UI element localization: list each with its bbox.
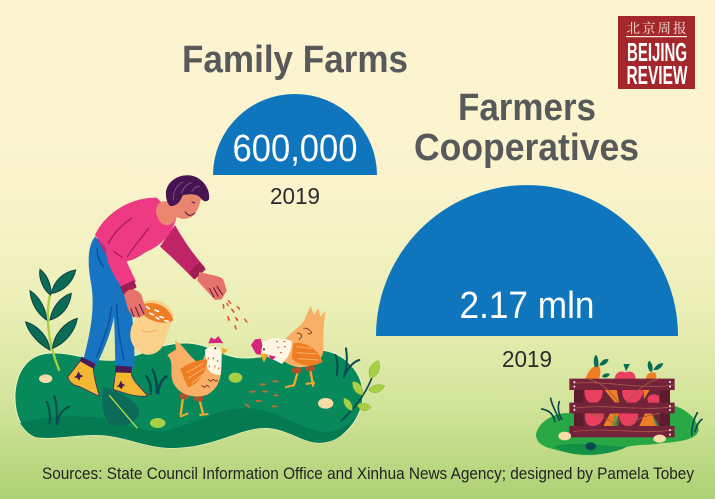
semicircle: family farms 600,000: 600,000: [232, 128, 358, 170]
falling seeds and ground grain: [223, 301, 278, 407]
title: Farmers Cooperatives: Cooperatives: [414, 127, 639, 169]
crate of carrots and apples on mound: [536, 355, 702, 455]
farmer trousers: [83, 237, 134, 369]
seed bag: [130, 300, 174, 355]
semicircle: farmers cooperatives 2.17 mln: [376, 185, 678, 336]
mound: [536, 405, 699, 455]
leaf near feet: [102, 387, 139, 426]
farmer far arm: [160, 225, 205, 279]
hen pecking: [251, 306, 326, 387]
farmer boots: [79, 357, 132, 373]
title: Farmers Cooperatives: [414, 87, 639, 169]
pebbles, grass and sprig on right of island: [146, 348, 385, 428]
title: Farmers Cooperatives: Farmers: [458, 87, 596, 129]
ground island with plant: [15, 269, 363, 448]
year label: family farms 2019: 2019: [270, 183, 320, 209]
carrots and apples: [585, 366, 657, 379]
title: Family Farms: Family Farms: [182, 39, 408, 81]
farmer figure: [68, 175, 240, 396]
farmer hands: [197, 272, 227, 300]
farmer sweater: [95, 198, 177, 287]
logo: Beijing Review: [618, 16, 695, 90]
stones at crate base: [558, 432, 571, 440]
semicircle: farmers cooperatives 2.17 mln: 2.17 mln: [460, 285, 594, 327]
plant: tall leaves: [26, 269, 77, 371]
crate frame: [574, 388, 670, 435]
hen standing: [167, 336, 228, 417]
grass: [542, 398, 702, 435]
year label: cooperatives 2019: 2019: [502, 346, 552, 372]
ground pebbles and grass: [39, 370, 241, 428]
semicircle: family farms 600,000: [213, 94, 377, 175]
farmer neck and head: [156, 201, 177, 225]
logo: Beijing Review: 北京周报: [626, 17, 686, 37]
